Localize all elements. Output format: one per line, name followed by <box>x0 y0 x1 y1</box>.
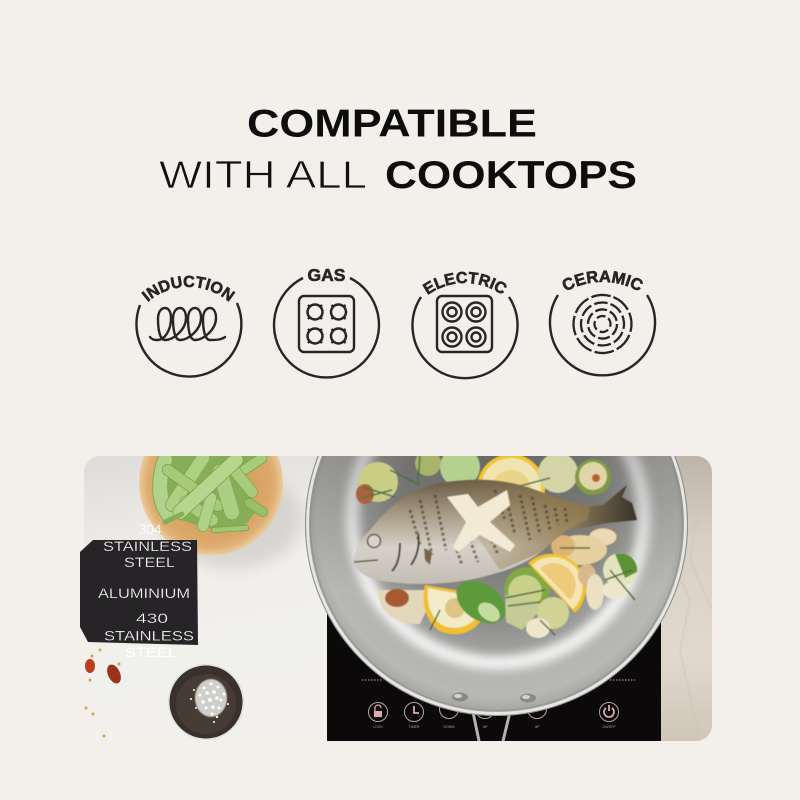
ceramic label: CERAMIC <box>562 270 643 290</box>
ceramic heat rings <box>565 286 640 362</box>
label text: STAINLESS <box>103 538 192 554</box>
cooktop button labels: TIMER <box>409 725 420 729</box>
photo: pan with fish on cooktop <box>84 456 712 741</box>
salt bowl <box>168 664 244 740</box>
label text: 430 <box>136 610 168 626</box>
label text: STEEL <box>124 554 175 570</box>
pan handle <box>473 712 510 741</box>
cooktop button labels <box>374 726 616 728</box>
label text: STAINLESS <box>104 628 194 644</box>
cooktop button labels: UP <box>483 725 488 729</box>
icon: induction <box>135 276 243 378</box>
label text: STEEL <box>125 644 177 660</box>
cooktop button labels: DOWN <box>443 725 455 729</box>
gas burners <box>308 304 346 344</box>
cooktop button labels: LOCK <box>373 725 383 729</box>
frying pan <box>305 456 688 716</box>
cooktop button labels: UP <box>535 725 540 729</box>
black label plate <box>80 540 198 645</box>
gas label: GAS <box>308 265 345 285</box>
vegetables around the fish <box>356 447 637 638</box>
material layers label <box>80 521 198 660</box>
cooktop buttons <box>368 700 618 722</box>
icon: ceramic <box>548 270 656 376</box>
label text: ALUMINIUM <box>98 585 190 601</box>
induction coil <box>150 308 225 340</box>
title: COOKTOPS <box>385 154 637 197</box>
icon: gas <box>274 265 379 377</box>
electric hob plate <box>437 296 492 352</box>
induction label: INDUCTION <box>141 276 236 302</box>
faint 304 text above label: 304 <box>138 521 162 537</box>
electric rings <box>442 302 486 346</box>
cooktop button labels: ON/OFF <box>602 725 616 729</box>
wooden bowl with snap peas <box>139 456 305 572</box>
gas hob plate <box>299 296 354 352</box>
title <box>159 102 637 197</box>
icon: electric <box>411 272 519 380</box>
title: COMPATIBLE <box>247 102 537 146</box>
induction cooktop surface <box>327 600 661 741</box>
fish <box>353 480 637 584</box>
title: WITH ALL <box>159 154 367 197</box>
label text <box>98 538 194 660</box>
electric label: ELECTRIC <box>422 272 507 295</box>
chilli flakes <box>84 648 124 738</box>
